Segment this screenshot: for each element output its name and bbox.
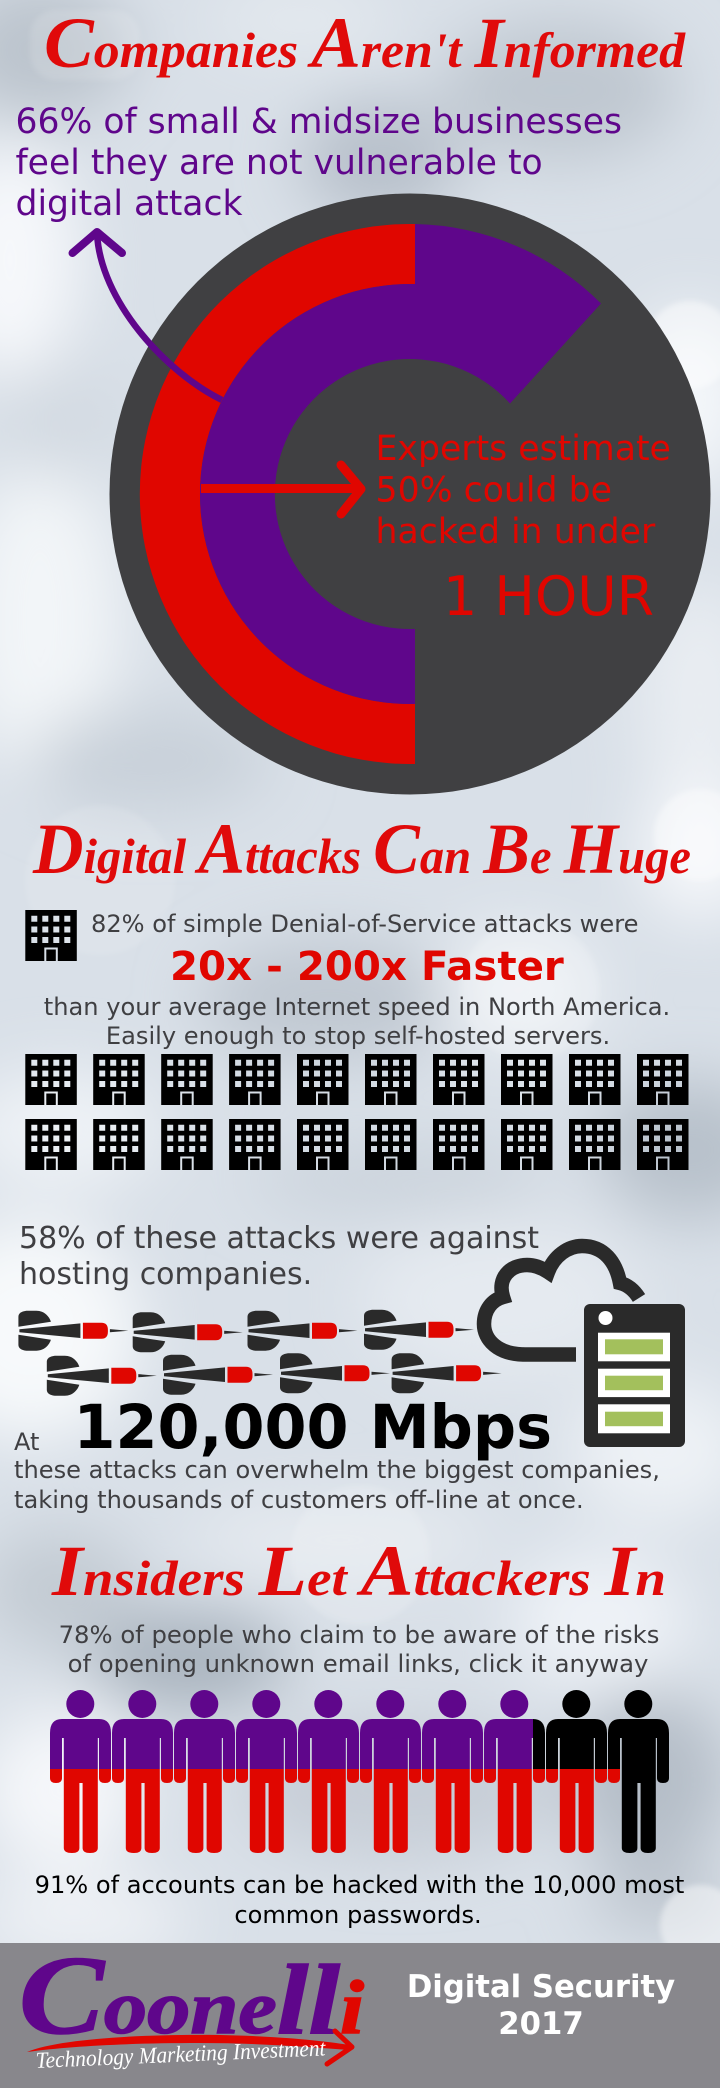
footer band [0,1943,720,2088]
icon: single building [25,910,77,961]
text: 66% statistic: digital attack [16,184,242,224]
text: experts estimate: hacked in under [376,512,656,552]
title: Digital Attacks Can Be Huge: Digital Attacks Can Be Huge [32,809,691,889]
arrow: purple curve to 66% text [72,232,222,400]
outer red ring [140,224,415,764]
person 1 [50,1690,111,1853]
text: 58% statistic: hosting companies. [19,1257,312,1292]
text: 82% statistic: 82% of simple Denial-of-Service attacks were [91,910,638,938]
text: 20x - 200x Faster: 20x - 200x Faster [170,943,564,990]
text: experts estimate: 50% could be [376,470,612,510]
person 10 [608,1690,669,1853]
person 4 [236,1690,297,1853]
text: internet speed comparison: Easily enough to stop self-hosted servers. [106,1022,610,1050]
icon: server [584,1304,685,1447]
chart: radial chart [110,194,710,794]
chart background disc [110,194,710,794]
text: 78% statistic: of opening unknown email links, click it anyway [68,1649,648,1678]
panel: footer [0,1934,720,2088]
arrow: red to experts text [201,465,361,514]
icons: darts [18,1310,502,1396]
text: 91% statistic: 91% of accounts can be hacked with the 10,000 most [35,1871,684,1899]
logo wordmark: Coonelli [19,1934,364,2058]
logo tagline: Technology Marketing Investment [35,2035,326,2073]
footer title: Digital Security [407,1970,675,2005]
logo swoosh arrow [27,2035,349,2052]
person 7 [422,1690,483,1853]
text: 91% statistic: common passwords. [234,1901,482,1929]
logo: Coonelli [19,1934,364,2073]
text: overwhelm companies: these attacks can overwhelm the biggest companies, [14,1456,660,1484]
text: 78% statistic: 78% of people who claim to be aware of the risks [59,1620,659,1649]
person 8 [484,1690,545,1853]
chart: row of people [50,1690,669,1853]
title: Companies Aren't Informed: Companies Aren't Informed [44,3,686,83]
text: 1 HOUR: 1 HOUR [443,565,654,628]
icons: two rows of buildings [25,1054,689,1170]
person 9 [546,1690,607,1853]
text: 58% statistic: 58% of these attacks were against [19,1221,539,1256]
text: 66% statistic: 66% of small & midsize businesses [16,102,622,142]
person 5 [298,1690,359,1853]
footer title: 2017 [498,2007,584,2042]
text: 66% statistic: feel they are not vulnerable to [16,143,543,183]
text: internet speed comparison: than your average Internet speed in North America. [44,993,670,1021]
text: At: At [14,1428,39,1456]
text: 120,000 Mbps: 120,000 Mbps [74,1393,552,1463]
text: overwhelm companies: taking thousands of customers off-line at once. [14,1486,584,1514]
person 6 [360,1690,421,1853]
person 2 [112,1690,173,1853]
inner purple ring [200,224,601,704]
text: experts estimate: Experts estimate [376,429,671,469]
person 3 [174,1690,235,1853]
title: Insiders Let Attackers In: Insiders Let Attackers In [51,1531,666,1611]
icon: cloud [484,1246,639,1354]
